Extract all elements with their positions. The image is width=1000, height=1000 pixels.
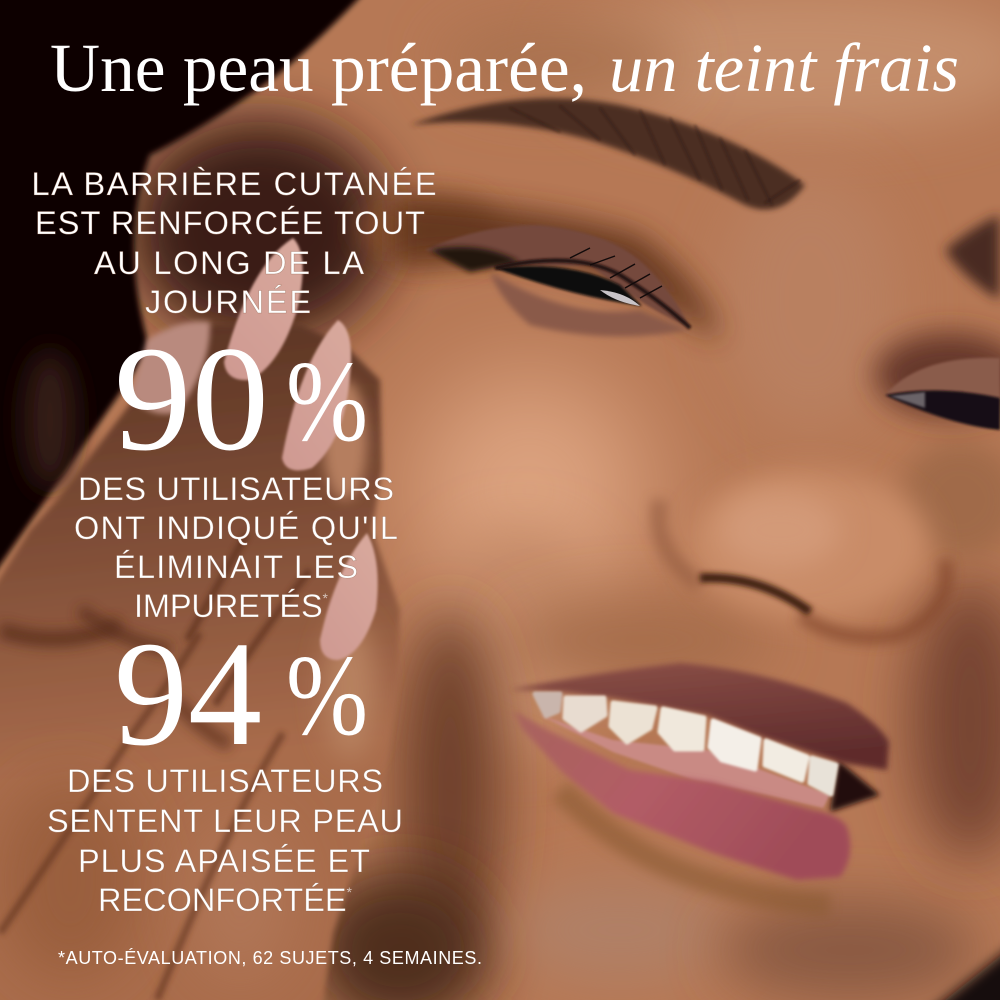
title: un teint frais [609,30,959,106]
text block: impurities: DES UTILISATEURS [78,471,394,507]
lower lip [513,710,850,880]
hair [0,0,430,680]
gums [540,715,830,808]
text block: barrier: JOURNÉE [145,284,311,320]
text block: impurities [74,471,398,624]
text block: barrier [32,166,436,320]
finger grooves [0,533,310,1000]
text block: soothed skin: DES UTILISATEURS [67,763,383,799]
left eye [395,200,720,340]
text block: soothed skin: PLUS APAISÉE ET [78,843,370,879]
text block: barrier: EST RENFORCÉE TOUT [35,205,425,241]
stat: 90 %: 90 [114,316,269,482]
text block: soothed skin: * [347,884,353,900]
stat: 94 %: % [286,632,368,760]
hand [0,238,400,1000]
stat: 94 % [114,611,368,777]
title: Une peau préparée, [50,30,587,106]
text block: soothed skin: SENTENT LEUR PEAU [47,803,403,839]
left eyebrow [410,98,805,210]
teeth [535,694,836,794]
nose [658,470,947,638]
stat: 90 %: % [286,338,368,466]
text block: impurities: ONT INDIQUÉ QU'IL [74,510,398,546]
stat: 94 %: 94 [114,611,262,777]
text block: soothed skin [47,763,403,918]
upper lip [510,663,889,770]
text block: impurities: IMPURETÉS [134,588,323,624]
nails [130,321,210,414]
title [50,30,959,106]
text block: barrier: AU LONG DE LA [94,245,364,281]
right eye and brow [875,215,1000,430]
footnote: *AUTO-ÉVALUATION, 62 SUJETS, 4 SEMAINES. [58,948,482,968]
text block: soothed skin: RECONFORTÉE [98,882,347,918]
mouth [510,663,889,880]
text block: barrier: LA BARRIÈRE CUTANÉE [32,166,436,202]
text block: impurities: ÉLIMINAIT LES [114,549,358,585]
ear shadow [24,350,76,490]
mouth interior [830,760,880,812]
stat: 90 % [114,316,368,482]
text block: impurities: * [323,590,329,606]
